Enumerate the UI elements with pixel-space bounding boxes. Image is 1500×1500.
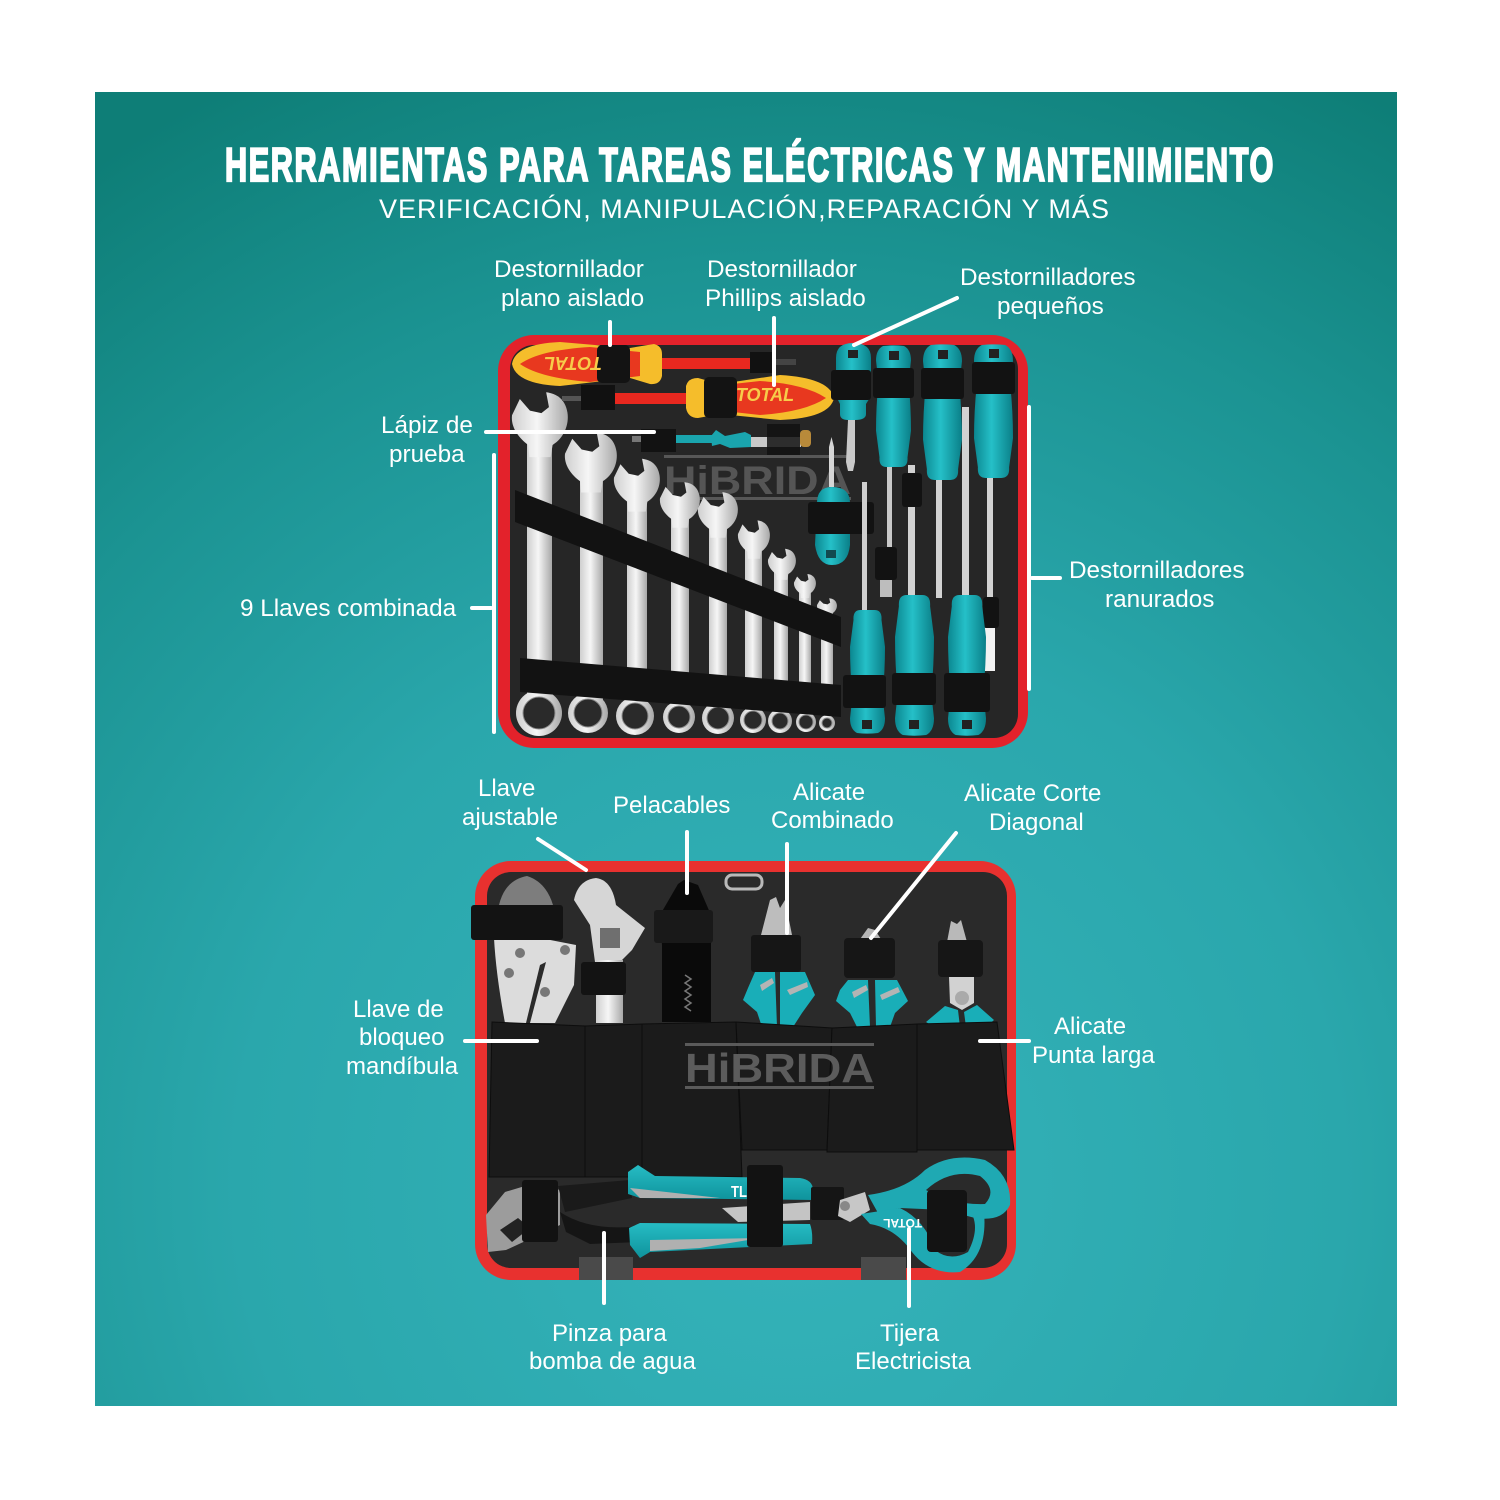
case frame [475,861,1016,1280]
label: long-nose pliers: Punta larga [1032,1042,1155,1069]
watermark: HiBRIDA [685,1045,874,1091]
icon: insulated flat screwdriver: TOTAL [544,353,602,373]
label: diagonal pliers [964,780,1101,836]
icon: small screwdriver 1 [831,343,871,471]
label: phillips screwdriver: Phillips aislado [705,285,866,312]
label: diagonal pliers: Alicate Corte [964,780,1101,807]
icon: top buckle [726,875,762,889]
label: scissors: Tijera [880,1320,940,1347]
label: phillips screwdriver: Destornillador [707,256,857,283]
icon: stubby screwdriver [808,437,874,565]
label: adjustable wrench: Llave [478,775,535,802]
pockets [489,1022,1014,1177]
label: test pencil: Lápiz de [381,412,473,439]
label: long-nose pliers [1032,1013,1155,1069]
panel: lower tool case [471,861,1016,1280]
label: combination pliers [771,779,894,834]
callout lines [465,298,1060,1306]
label: flat screwdriver: Destornillador [494,256,644,283]
icon: water pump pliers [486,1165,813,1258]
icon: centre strap [747,1165,783,1247]
icon: insulated flat screwdriver [512,342,796,386]
label: test pencil [381,412,473,468]
label: locking pliers: bloqueo [359,1024,444,1051]
icon: insulated phillips screwdriver [562,375,834,420]
label: adjustable wrench [462,775,558,831]
icon: test pencil [632,424,811,455]
icon: locking pliers [471,876,576,1023]
label: slotted screwdrivers: Destornilladores [1069,557,1245,584]
label: test pencil: prueba [389,441,465,468]
icon: electrician scissors: TOTAL [883,1216,922,1230]
label: scissors: Electricista [855,1348,972,1375]
icon: phillips screwdrivers, bottom row [843,407,990,736]
icon: bottom hinges [579,1257,906,1280]
icon: insulated phillips screwdriver: TOTAL [736,385,794,405]
label: small screwdrivers: pequeños [997,293,1104,320]
subtitle: VERIFICACIÓN, MANIPULACIÓN,REPARACIÓN Y MÁS [379,193,1110,224]
case frame [498,335,1028,748]
icon: combination pliers [743,897,815,1027]
icon: water pump pliers: TL [731,1184,747,1201]
label: small screwdrivers: Destornilladores [960,264,1136,291]
watermark: HiBRIDA [664,459,851,503]
panel: upper tool case [498,335,1028,748]
wrench straps [515,490,841,717]
label: diagonal pliers: Diagonal [989,809,1084,836]
icon: wire stripper [654,880,713,1022]
label: water pump pliers: Pinza para [552,1320,667,1347]
label: long-nose pliers: Alicate [1054,1013,1126,1040]
label: slotted screwdrivers [1069,557,1245,613]
label: wire stripper: Pelacables [613,792,730,819]
icon: diagonal cutting pliers [836,928,908,1027]
label: slotted screwdrivers: ranurados [1105,586,1214,613]
icon: adjustable wrench [574,878,645,1023]
label: small screwdrivers [960,264,1136,320]
background panel [95,92,1397,1406]
icon: long-nose pliers [926,920,994,1027]
label: flat screwdriver: plano aislado [501,285,644,312]
icon: electrician scissors [722,1158,1010,1272]
label: adjustable wrench: ajustable [462,804,558,831]
label: phillips screwdriver [705,256,866,312]
icon: 9 combination wrenches [512,392,837,736]
label: combination pliers: Alicate [793,779,865,806]
label: locking pliers [346,996,459,1080]
icon: slotted screwdrivers, top row [873,344,1015,671]
label: water pump pliers: bomba de agua [529,1348,696,1375]
label: wrenches: 9 Llaves combinada [240,595,457,622]
label: flat screwdriver [494,256,644,312]
label: scissors [855,1320,972,1375]
label: locking pliers: Llave de [353,996,444,1023]
label: locking pliers: mandíbula [346,1053,459,1080]
label: water pump pliers [529,1320,696,1375]
label: combination pliers: Combinado [771,807,894,834]
